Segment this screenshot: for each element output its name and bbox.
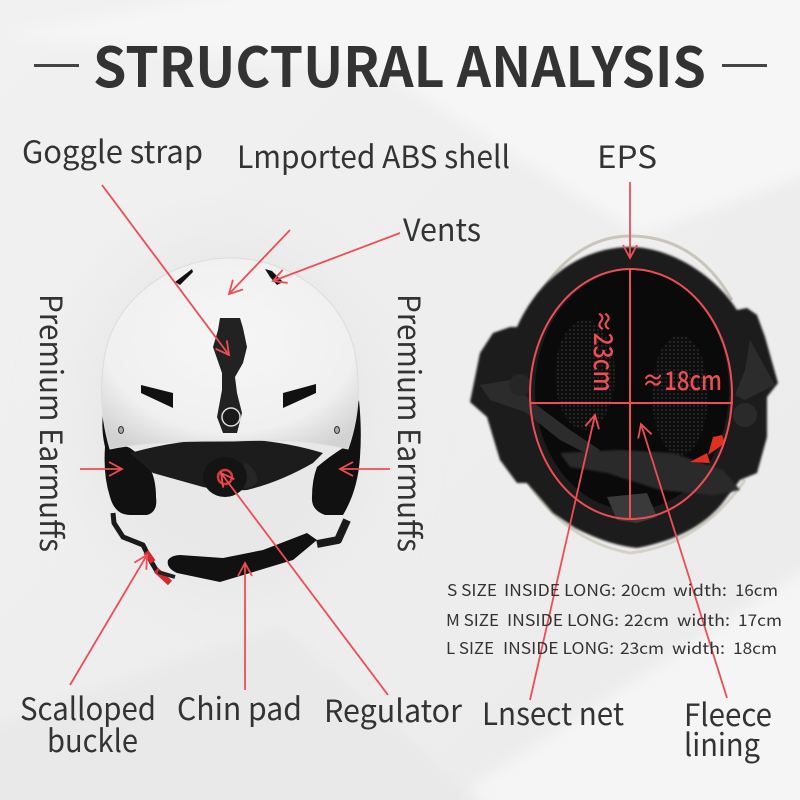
- label: insect net: Lnsect net: [482, 689, 624, 734]
- label: vents: Vents: [403, 205, 481, 250]
- size table: width:: [672, 635, 725, 659]
- size table: M SIZE: [446, 607, 499, 631]
- shell: [102, 258, 358, 449]
- label: fleece lining: lining: [684, 720, 760, 765]
- chin strap: [113, 513, 347, 583]
- goggle strap clip: [213, 318, 247, 433]
- shell rim: bottom: [520, 470, 745, 553]
- label: scalloped buckle: buckle: [47, 716, 138, 761]
- shell rim: [528, 236, 732, 312]
- interior padding: [535, 270, 729, 510]
- size table: 18cm: [733, 635, 777, 659]
- helmet front view: [102, 258, 361, 583]
- size table: 16cm: [735, 577, 778, 601]
- red buckle: [690, 435, 725, 463]
- size table: 22cm: [624, 607, 669, 631]
- size table: INSIDE LONG:: [504, 577, 616, 601]
- label: EPS: EPS: [597, 132, 657, 177]
- label: earmuffs left: Premium Earmuffs: [31, 294, 76, 552]
- label: chin pad: Chin pad: [177, 684, 302, 729]
- ear pad: left: [102, 413, 156, 515]
- pointer arrows: [70, 182, 727, 700]
- chin liner: [130, 439, 323, 491]
- size table: S SIZE: [447, 577, 497, 601]
- size table: 17cm: [738, 607, 782, 631]
- size table: [446, 577, 782, 659]
- liner and ear pads: [470, 247, 778, 548]
- vents: [141, 269, 316, 408]
- regulator dial: [203, 457, 257, 497]
- title: STRUCTURAL ANALYSIS: [93, 23, 706, 103]
- helmet inside view: [470, 236, 778, 553]
- size table: INSIDE LONG:: [507, 607, 619, 631]
- label: scalloped buckle: Scalloped: [20, 684, 156, 729]
- mesh pads: [555, 320, 708, 455]
- side straps and buckles: [480, 340, 775, 458]
- label: scalloped buckle: [20, 684, 156, 761]
- measurement overlay: [530, 269, 733, 520]
- size table: width:: [677, 607, 730, 631]
- size table: L SIZE: [446, 635, 494, 659]
- dimension: width: ≈18cm: [642, 361, 722, 398]
- side rivets: [118, 426, 340, 434]
- label: fleece lining: Fleece: [684, 690, 772, 735]
- label: ABS shell: Lmported ABS shell: [237, 132, 510, 177]
- size table: 20cm: [621, 577, 666, 601]
- rear dial: [607, 493, 657, 523]
- label: fleece lining: [684, 690, 772, 765]
- ear pad: right: [312, 400, 361, 515]
- label: goggle strap: Goggle strap: [22, 127, 203, 172]
- size table: 23cm: [620, 635, 664, 659]
- size table: width:: [673, 577, 727, 601]
- label: earmuffs right: Premium Earmuffs: [389, 294, 434, 552]
- dimension: length: ≈23cm: [586, 310, 623, 392]
- folded chin strap: [560, 450, 740, 495]
- size table: INSIDE LONG:: [503, 635, 614, 659]
- label: regulator: Regulator: [324, 686, 463, 731]
